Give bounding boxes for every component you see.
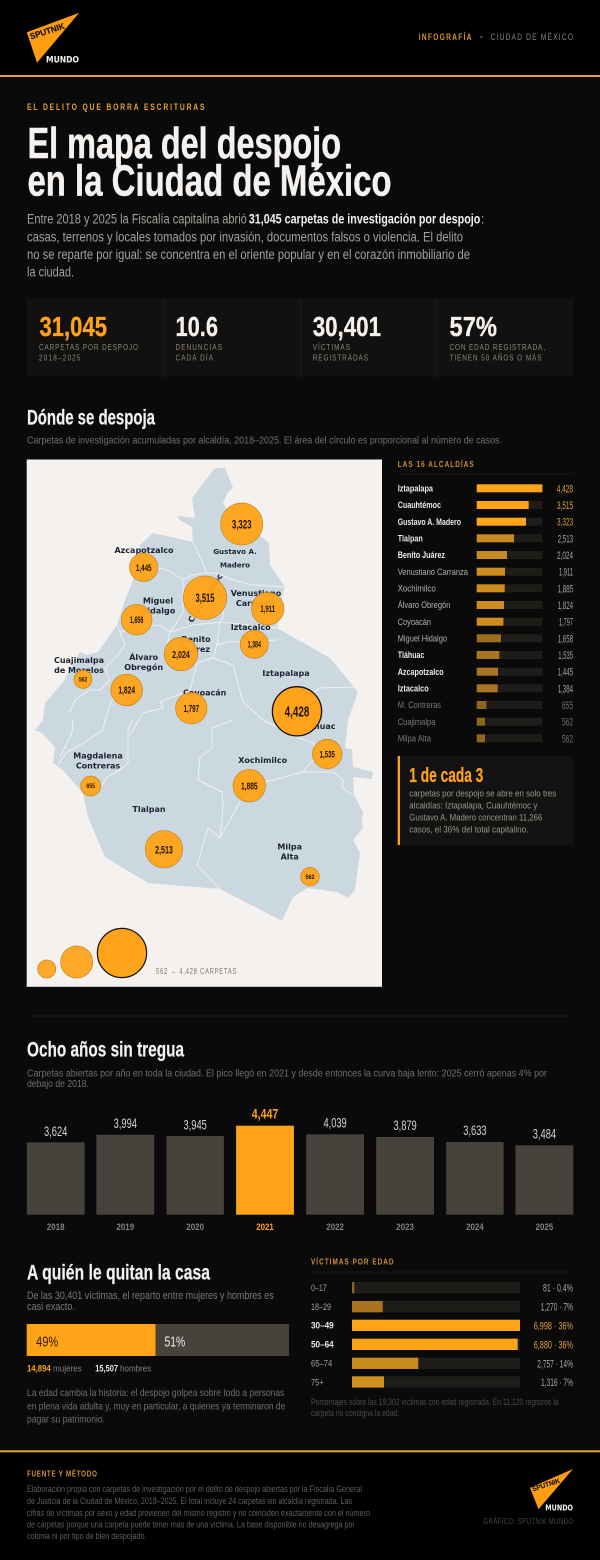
bar values: 3,945 — [184, 1116, 207, 1132]
ranking names: Gustavo A. Madero — [398, 517, 461, 527]
map bubbles: case counts: 1,911 — [260, 604, 276, 615]
bar chart: case files per year — [27, 1105, 573, 1232]
ranking values: 1,824 — [558, 600, 573, 612]
bar values: 3,994 — [114, 1115, 137, 1131]
map bubbles: case counts: 1,658 — [130, 615, 143, 626]
ranking values: 3,323 — [557, 517, 573, 529]
ranking names: Tláhuac — [398, 650, 424, 660]
year labels: 2025 — [536, 1222, 553, 1232]
map labels: alcaldías: Benito — [181, 635, 211, 644]
ranking names: Álvaro Obregón — [398, 600, 450, 610]
stat: registered victims — [313, 311, 381, 363]
gender subtitle — [27, 1290, 274, 1313]
panel: ranking of 16 alcaldías: LAS 16 ALCALDÍAS — [398, 459, 474, 469]
intro paragraph: Entre 2018 y 2025 la Fiscalía capitalina abrió — [27, 212, 247, 227]
split bar: women and men: 49% — [36, 1334, 58, 1350]
bar values: 3,624 — [44, 1123, 67, 1139]
age labels: 75+ — [311, 1377, 324, 1388]
map labels: alcaldías: Venustiano — [231, 589, 282, 598]
map labels: alcaldías: Tlalpan — [132, 805, 166, 814]
map labels: alcaldías: Iztapalapa — [262, 669, 310, 678]
map size legend: 562 → 4,428 CARPETAS — [156, 968, 237, 976]
gender subtitle: De las 30,401 víctimas, el reparto entre mujeres y hombres es — [27, 1290, 274, 1302]
yearly chart subtitle: Carpetas abiertas por año en toda la ciudad. El pico llegó en 2021 y desde entonces la curva baja lento: 2025 cerró apenas 4% por — [27, 1068, 548, 1079]
stat: total case files: CARPETAS POR DESPOJO — [39, 342, 138, 352]
panel: bubble map — [27, 460, 382, 987]
ranking names: Venustiano Carranza — [398, 567, 468, 577]
age commentary paragraph: La edad cambia la historia: el despojo golpea sobre todo a personas — [27, 1387, 284, 1399]
stat: share aged 50 or more: 57% — [450, 311, 497, 342]
footer — [0, 1450, 600, 1560]
ranking values: 2,024 — [557, 550, 573, 562]
intro paragraph — [27, 212, 485, 279]
age tracks — [352, 1282, 520, 1388]
ranking values: 562 — [562, 733, 573, 745]
age labels: 18–29 — [311, 1302, 331, 1313]
map labels: alcaldías: Tláhuac — [300, 722, 336, 731]
ranking names: M. Contreras — [398, 700, 441, 710]
callout: 1 de cada 3 — [398, 756, 573, 845]
map labels: alcaldías — [54, 546, 336, 862]
source text: colonia ni por tipo de bien despojado. — [27, 1531, 147, 1541]
ranking tracks — [477, 484, 542, 742]
header bar — [0, 0, 600, 77]
map bubbles: case counts: 1,824 — [118, 686, 135, 697]
age values: 1,270 · 7% — [541, 1302, 573, 1314]
panel: victims by age — [311, 1257, 573, 1418]
source text: Elaboración propia con carpetas de investigación por el delito de despojo abiertas por la Fiscalía General — [27, 1484, 362, 1494]
bar values: 3,633 — [463, 1122, 487, 1138]
map bubbles: case counts: 2,513 — [155, 844, 173, 856]
year labels: 2024 — [466, 1222, 484, 1232]
ranking values: 1,885 — [558, 583, 573, 595]
map labels: alcaldías: de Morelos — [54, 666, 104, 675]
gender counts: 15,507 — [95, 1364, 118, 1375]
map labels: alcaldías: Álvaro — [129, 651, 159, 662]
ranking values: 1,797 — [559, 617, 573, 629]
intro paragraph: la ciudad. — [27, 264, 74, 279]
stat: share aged 50 or more: CON EDAD REGISTRADA, — [450, 342, 545, 352]
bar values: 3,484 — [533, 1126, 556, 1142]
eyebrow: EL DELITO QUE BORRA ESCRITURAS — [27, 102, 205, 112]
bar values — [44, 1105, 556, 1142]
age values: 2,757 · 14% — [537, 1358, 573, 1370]
icon: Sputnik Mundo logo: SPUTNIK — [29, 21, 67, 41]
icon: footer logo: MUNDO — [545, 1503, 573, 1512]
age values: 6,880 · 36% — [534, 1339, 573, 1351]
title — [28, 119, 392, 206]
map bubbles: case counts: 1,535 — [320, 749, 335, 760]
ranking values: 1,384 — [558, 683, 573, 695]
stat: registered victims: 30,401 — [313, 311, 381, 342]
age commentary paragraph — [27, 1387, 285, 1426]
map labels: alcaldías: Hidalgo — [141, 607, 176, 616]
ranking bars — [477, 484, 542, 742]
map labels: alcaldías: Cuauhtémoc — [186, 572, 225, 624]
map bubbles: case counts: 3,515 — [196, 591, 215, 605]
map size legend — [38, 928, 237, 978]
year labels: 2023 — [396, 1222, 414, 1232]
stat: share aged 50 or more: TIENEN 50 AÑOS O MÁS — [450, 353, 542, 363]
ranking names: Xochimilco — [398, 584, 436, 594]
stat: total case files: 31,045 — [40, 311, 107, 342]
intro paragraph: 31,045 carpetas de investigación por despojo — [249, 212, 480, 227]
stat: reports per day: CADA DÍA — [176, 353, 213, 363]
panel: ranking of 16 alcaldías — [398, 459, 573, 745]
map labels: alcaldías: Milpa — [277, 843, 302, 852]
ranking names: Tlalpan — [398, 534, 423, 544]
title: en la Ciudad de México — [28, 157, 392, 206]
map labels: alcaldías: Azcapotzalco — [114, 546, 174, 555]
bar values: 3,879 — [393, 1117, 417, 1133]
ranking names: Coyoacán — [398, 617, 431, 627]
intro paragraph: : — [481, 212, 485, 227]
age footnote: carpeta no consigna la edad. — [311, 1408, 399, 1418]
stat: registered victims: REGISTRADAS — [313, 353, 368, 363]
age values: 6,998 · 36% — [534, 1320, 573, 1332]
yearly chart subtitle: debajo de 2018. — [27, 1079, 89, 1090]
icon: Sputnik Mundo logo — [27, 13, 79, 65]
callout: 1 de cada 3: casos, el 36% del total capitalino. — [409, 824, 528, 836]
source text — [27, 1484, 370, 1541]
gender counts: hombres — [120, 1364, 152, 1375]
title: El mapa del despojo — [28, 119, 341, 168]
age values: 1,316 · 7% — [541, 1377, 573, 1389]
map labels: alcaldías: Obregón — [124, 662, 163, 672]
graphic credit: GRÁFICO: SPUTNIK MUNDO — [483, 1516, 573, 1526]
map bubbles: case counts — [74, 503, 342, 886]
callout: 1 de cada 3: carpetas por despojo se abre en solo tres — [409, 788, 556, 800]
ranking values: 562 — [562, 717, 573, 729]
stat: share aged 50 or more — [450, 311, 545, 363]
map labels: alcaldías: Cuajimalpa — [54, 656, 104, 665]
age labels: 65–74 — [311, 1359, 332, 1370]
age labels: 0–17 — [311, 1283, 327, 1294]
map labels: alcaldías: Magdalena — [73, 752, 123, 761]
gender counts: mujeres — [53, 1364, 82, 1375]
source text: de Justicia de la Ciudad de México, 2018–2025. El total incluye 24 carpetas sin alcaldía registrada. Las — [27, 1496, 352, 1506]
map bubbles: case counts: 1,885 — [241, 781, 258, 792]
intro paragraph: no se reparte por igual: se concentra en el oriente popular y en el corazón inmobiliario de — [27, 247, 470, 262]
map bubbles: case counts: 2,024 — [172, 649, 190, 661]
map labels: alcaldías: Xochimilco — [238, 756, 288, 765]
map labels: alcaldías: Madero — [220, 560, 250, 570]
stat: registered victims: VÍCTIMAS — [313, 342, 350, 352]
map bubbles: case counts: 4,428 — [285, 704, 309, 721]
ranking values — [557, 483, 573, 745]
map bubbles: case counts: 655 — [86, 784, 96, 790]
header navigation text: INFOGRAFÍA — [419, 32, 472, 42]
ranking values: 1,535 — [558, 650, 573, 662]
ranking values: 4,428 — [557, 483, 573, 495]
age labels: 30–49 — [311, 1321, 334, 1332]
heading: A quién le quitan la casa: A quién le quitan la casa — [27, 1261, 210, 1284]
ranking names: Cuauhtémoc — [398, 500, 441, 510]
source heading: FUENTE Y MÉTODO — [27, 1468, 97, 1479]
map bubbles: case counts: 562 — [306, 875, 315, 881]
stat: reports per day — [176, 311, 222, 363]
header navigation text: CIUDAD DE MÉXICO — [491, 32, 573, 42]
yearly chart subtitle — [27, 1068, 548, 1090]
map labels: alcaldías: Alta — [281, 853, 299, 862]
ranking names: Cuajimalpa — [398, 717, 435, 727]
source text: de carpetas porque una carpeta puede tener más de una víctima. La base disponible no desagrega por — [27, 1520, 355, 1530]
map labels: alcaldías: Coyoacán — [183, 689, 227, 698]
map labels: alcaldías: Contreras — [76, 762, 120, 771]
ranking names: Iztapalapa — [398, 484, 434, 494]
split bar: women and men: 51% — [164, 1334, 185, 1350]
intro paragraph: casas, terrenos y locales tomados por invasión, documentos falsos o violencia. El delito — [27, 229, 463, 244]
map bubbles: case counts: 1,797 — [183, 704, 199, 715]
callout: 1 de cada 3: 1 de cada 3 — [409, 765, 483, 787]
map bubbles: case counts: 562 — [79, 678, 88, 684]
map bubbles: case counts: 1,445 — [136, 563, 152, 574]
ranking names — [398, 484, 468, 744]
age footnote — [311, 1397, 559, 1418]
age labels — [311, 1283, 334, 1388]
map labels: alcaldías: Juárez — [181, 645, 210, 654]
source text: cifras de víctimas por sexo y edad provienen del mismo registro y no coinciden exactamente con el número — [27, 1508, 370, 1518]
ranking names: Azcapotzalco — [398, 667, 444, 677]
bar values: 4,447 — [252, 1105, 278, 1121]
map: land of Mexico City — [35, 468, 373, 921]
age values — [534, 1283, 573, 1389]
ranking values: 3,515 — [557, 500, 573, 512]
stat: total case files: 2018–2025 — [39, 353, 80, 363]
map labels: alcaldías: Gustavo A. — [213, 547, 257, 556]
bar values: 4,039 — [323, 1115, 347, 1131]
panel: key figures — [27, 298, 573, 377]
ranking values: 2,513 — [558, 533, 573, 545]
icon: footer logo — [530, 1469, 573, 1512]
heading: Ocho años sin tregua: Ocho años sin tregua — [27, 1039, 184, 1062]
year labels: 2021 — [256, 1222, 274, 1232]
ranking names: Benito Juárez — [398, 550, 445, 560]
ranking values: 1,445 — [558, 667, 573, 679]
ranking values: 1,911 — [559, 567, 573, 579]
ranking names: Miguel Hidalgo — [398, 634, 447, 644]
year labels: 2020 — [186, 1222, 204, 1232]
callout: 1 de cada 3: alcaldías: Iztapalapa, Cuauhtémoc y — [409, 800, 538, 812]
age commentary paragraph: pagar su patrimonio. — [27, 1414, 105, 1426]
ranking names: Milpa Alta — [398, 734, 431, 744]
ranking names: Iztacalco — [398, 684, 429, 694]
callout: 1 de cada 3: Gustavo A. Madero concentran 11,266 — [409, 812, 542, 824]
split bar: women and men — [27, 1324, 289, 1356]
panel: victims by age: VÍCTIMAS POR EDAD — [311, 1257, 394, 1267]
map labels: alcaldías: Miguel — [143, 597, 173, 606]
age commentary paragraph: en plena vida adulta y, muy en particular, a quienes ya terminaron de — [27, 1400, 285, 1412]
map bubbles: case counts: 3,323 — [232, 517, 252, 531]
stat: total case files — [39, 311, 138, 363]
gender counts — [27, 1364, 152, 1375]
map bubbles: case counts: 1,384 — [248, 640, 261, 650]
age labels: 50–64 — [311, 1340, 334, 1351]
age values: 81 · 0.4% — [543, 1283, 573, 1295]
year labels: 2019 — [116, 1222, 134, 1232]
header navigation text — [419, 32, 573, 42]
map subtitle: Carpetas de investigación acumuladas por alcaldía, 2018–2025. El área del círculo es proporcional al número de casos. — [27, 436, 502, 447]
map labels: alcaldías: Iztacalco — [231, 623, 271, 632]
icon: footer logo: SPUTNIK — [531, 1478, 561, 1493]
year labels: 2022 — [326, 1222, 344, 1232]
ranking values: 1,658 — [558, 633, 573, 645]
icon: Sputnik Mundo logo: MUNDO — [46, 56, 79, 66]
stat: reports per day: DENUNCIAS — [176, 342, 222, 352]
heading: Dónde se despoja: Dónde se despoja — [27, 407, 155, 430]
gender counts: 14,894 — [27, 1364, 51, 1375]
year labels — [47, 1222, 553, 1232]
age bars — [352, 1282, 520, 1388]
map labels: alcaldías: Carranza — [236, 599, 276, 608]
year labels: 2018 — [47, 1222, 64, 1232]
gender subtitle: casi exacto. — [27, 1301, 75, 1313]
ranking values: 655 — [562, 700, 573, 712]
stat: reports per day: 10.6 — [176, 311, 218, 342]
